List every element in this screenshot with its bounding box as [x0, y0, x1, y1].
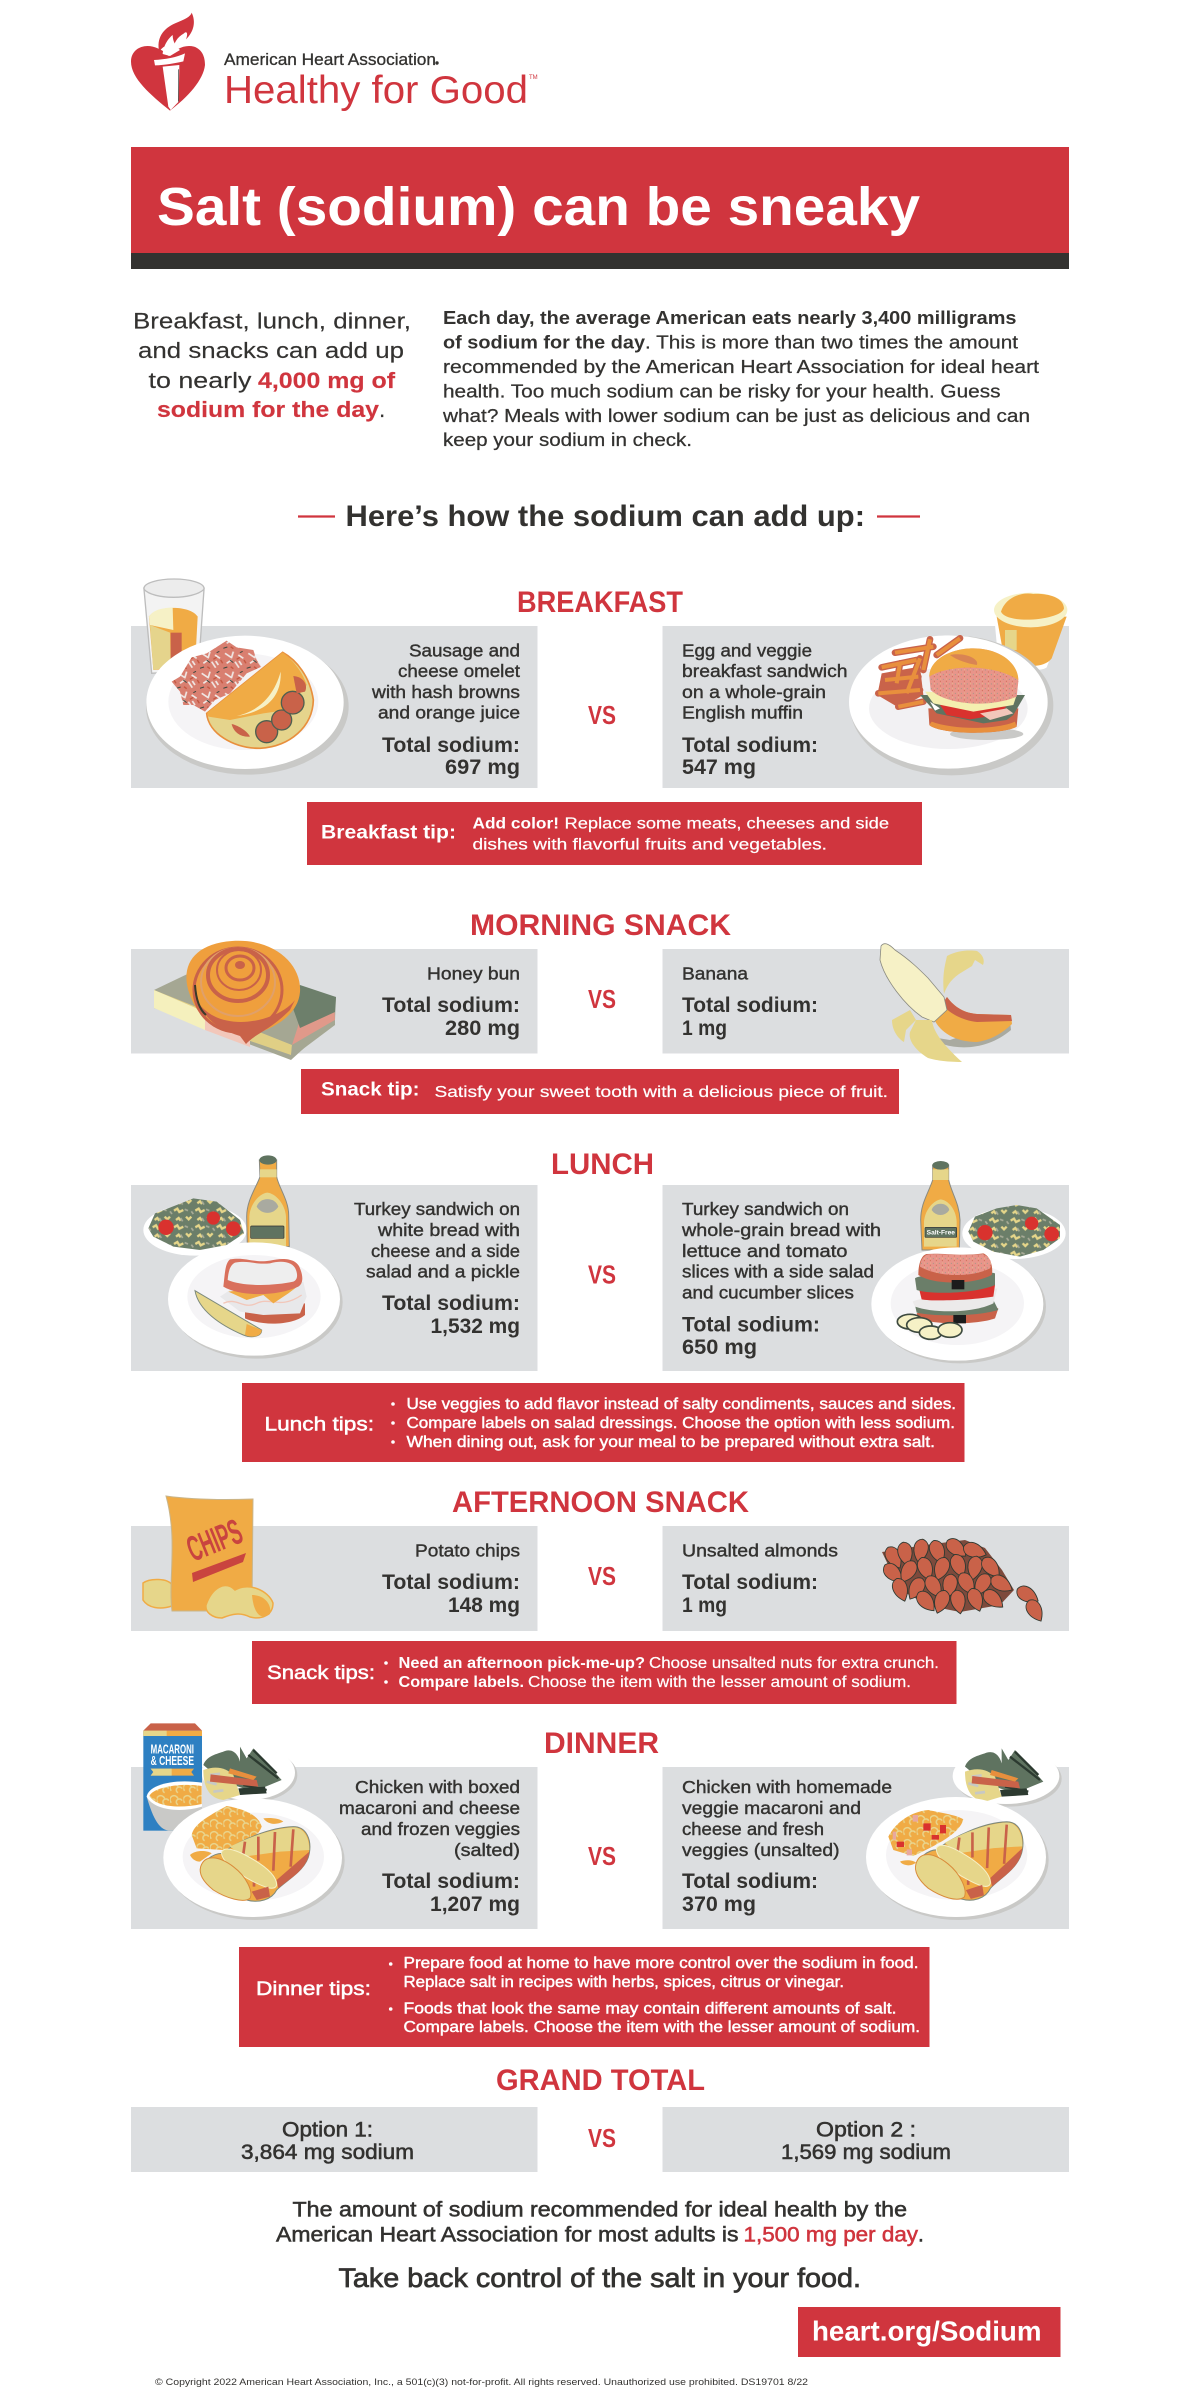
afternoon snack tips: Snack tips: [267, 1662, 375, 1684]
illustration: honey bun [154, 941, 336, 1060]
left option text [382, 1540, 520, 1617]
right option text: breakfast sandwich [682, 661, 848, 681]
left option text: salad and a pickle [366, 1262, 520, 1282]
illustration: turkey sandwich on white bread, salad, dressing [143, 1155, 343, 1359]
heading: grand total: GRAND TOTAL [496, 2064, 705, 2097]
registered mark [435, 61, 439, 65]
panel: afternoon snack [131, 1486, 1069, 1704]
right option text: 1 mg [682, 1017, 727, 1040]
afternoon snack tips: Need an afternoon pick-me-up? [398, 1655, 645, 1672]
right option text: Total sodium: [682, 1314, 820, 1336]
illustration: turkey sandwich on whole grain, salad, dressing [871, 1161, 1066, 1363]
right option text: whole-grain bread with [681, 1220, 881, 1240]
title: Salt (sodium) can be sneaky [157, 177, 920, 237]
left option text: Total sodium: [382, 734, 520, 757]
left option text: 1,532 mg [430, 1315, 520, 1338]
option 2 card [662, 2107, 1069, 2172]
right option text [681, 1199, 881, 1359]
vs: VS [588, 1260, 616, 1290]
right option text: lettuce and tomato [682, 1241, 848, 1261]
option card left [131, 1185, 538, 1371]
right option text [682, 1777, 892, 1916]
snack tip: Satisfy your sweet tooth with a delicious piece of fruit. [434, 1084, 888, 1101]
option card right [662, 626, 1069, 788]
intro right paragraph [442, 308, 1039, 450]
breakfast tip: dishes with flavorful fruits and vegetables. [472, 836, 827, 854]
illustration: egg and veggie sandwich, fries, juice [849, 593, 1067, 775]
section intro heading: Here’s how the sodium can add up: [346, 500, 865, 533]
right option text: cheese and fresh [682, 1819, 824, 1839]
heading: dinner: DINNER [544, 1727, 659, 1760]
dinner tips [239, 1947, 930, 2047]
logo text: American Heart Association: American Heart Association [224, 51, 436, 69]
left option text: and orange juice [378, 702, 520, 722]
heading: morning snack: MORNING SNACK [470, 909, 732, 942]
copyright: © Copyright 2022 American Heart Association, Inc., a 501(c)(3) not-for-profit. All rights reserved. Unauthorized use prohibited. DS19701 8/22 [155, 2377, 808, 2388]
heading: afternoon snack: AFTERNOON SNACK [452, 1486, 750, 1519]
intro right paragraph: health. Too much sodium can be risky for your health. Guess [443, 382, 1000, 402]
panel: dinner [131, 1723, 1069, 2047]
left option text: Total sodium: [382, 1571, 520, 1594]
right option text: veggies (unsalted) [682, 1840, 840, 1860]
right option text: Total sodium: [682, 994, 818, 1017]
intro right paragraph: recommended by the American Heart Association for ideal heart [443, 357, 1039, 377]
afternoon snack tips [252, 1641, 956, 1704]
logo icon: heart and torch [131, 13, 205, 111]
option 1 card [131, 2107, 538, 2172]
dinner tips: Prepare food at home to have more control over the sodium in food. [404, 1955, 918, 1972]
intro right paragraph: . This is more than two times the amount [645, 332, 1018, 352]
intro right paragraph: of sodium for the day [443, 332, 645, 352]
right option text: on a whole-grain [682, 682, 826, 702]
vs: VS [588, 1841, 616, 1871]
right option text: veggie macaroni and [682, 1798, 861, 1818]
right option text: Total sodium: [682, 734, 818, 757]
left option text [382, 964, 520, 1040]
left option text [371, 640, 520, 779]
right option text: Total sodium: [682, 1571, 818, 1594]
title banner [131, 147, 1069, 269]
left option text: Total sodium: [382, 1870, 520, 1893]
right option text: Unsalted almonds [682, 1540, 838, 1560]
vs: VS [588, 700, 616, 730]
left option text: Honey bun [427, 964, 520, 984]
left option text: and frozen veggies [361, 1819, 520, 1839]
illustration: turkey sandwich on whole grain, salad, dressing: Salt-Free [927, 1230, 955, 1237]
left option text: Potato chips [415, 1540, 520, 1560]
option 2 card: 1,569 mg sodium [781, 2141, 951, 2164]
heading: breakfast: BREAKFAST [517, 586, 683, 619]
breakfast tip: Add color! [472, 816, 559, 832]
recommendation statement: The amount of sodium recommended for ideal health by the [292, 2198, 907, 2222]
snack tip [301, 1069, 899, 1114]
recommendation statement [276, 2198, 924, 2246]
right option text: Total sodium: [682, 1870, 818, 1893]
logo text: Healthy for Good: Healthy for Good [224, 69, 528, 112]
lunch tips: Lunch tips: [264, 1414, 374, 1436]
left option text: cheese and a side [371, 1241, 520, 1261]
option 1 card: Option 1: [282, 2118, 373, 2142]
intro left statement: to nearly [148, 368, 252, 393]
intro right paragraph: keep your sodium in check. [443, 430, 692, 450]
box label: & CHEESE [151, 1754, 194, 1768]
recommendation statement: . [918, 2224, 924, 2246]
panel: breakfast [131, 579, 1069, 865]
intro left statement: Breakfast, lunch, dinner, [133, 308, 411, 334]
right option text: 650 mg [682, 1336, 757, 1359]
option card left [131, 1767, 538, 1929]
left option text: (salted) [454, 1840, 520, 1860]
breakfast tip [307, 802, 922, 865]
left option text: with hash browns [371, 682, 520, 702]
illustration: potato chips bag [143, 1496, 273, 1618]
breakfast tip: Replace some meats, cheeses and side [564, 816, 889, 832]
box label: MACARONI [151, 1742, 194, 1756]
option card right [662, 1767, 1069, 1929]
illustration: banana [880, 944, 1012, 1062]
right option text: Egg and veggie [682, 640, 812, 660]
lunch tips: When dining out, ask for your meal to be prepared without extra salt. [406, 1434, 935, 1451]
left option text [339, 1777, 520, 1916]
recommendation statement: American Heart Association for most adults is [276, 2224, 738, 2246]
left option text: Turkey sandwich on [354, 1199, 520, 1219]
intro right paragraph: what? Meals with lower sodium can be just as delicious and can [442, 406, 1030, 426]
intro left statement: . [379, 397, 385, 422]
left option text: 697 mg [445, 756, 520, 779]
intro left statement: and snacks can add up [138, 338, 404, 363]
right option text [682, 964, 818, 1040]
chips label: CHIPS [181, 1511, 248, 1569]
option card left [131, 1526, 538, 1631]
right option text: English muffin [682, 702, 803, 722]
right option text: Chicken with homemade [682, 1777, 892, 1797]
lunch tips: Use veggies to add flavor instead of salty condiments, sauces and sides. [406, 1396, 956, 1413]
dinner tips: Dinner tips: [256, 1978, 371, 2000]
lunch tips [242, 1383, 964, 1462]
panel: morning snack [131, 909, 1069, 1114]
option card left [131, 949, 538, 1054]
heading: lunch: LUNCH [551, 1148, 654, 1181]
illustration: chicken with homemade macaroni [866, 1748, 1062, 1920]
closing statement: Take back control of the salt in your food. [338, 2263, 861, 2293]
option card right [662, 1526, 1069, 1631]
panel: grand total [131, 2064, 1069, 2172]
option card right [662, 949, 1069, 1054]
left option text: 280 mg [445, 1017, 520, 1040]
website call to action [798, 2307, 1060, 2357]
lunch tips: Compare labels on salad dressings. Choose the option with less sodium. [406, 1415, 955, 1432]
option 1 card: 3,864 mg sodium [241, 2141, 414, 2164]
logo: American Heart Association Healthy for Good [131, 13, 538, 112]
afternoon snack tips: Compare labels. [398, 1674, 524, 1691]
left option text: Total sodium: [382, 1292, 520, 1315]
illustration: chicken with boxed macaroni [143, 1723, 345, 1920]
intro left statement [133, 308, 411, 422]
breakfast tip: Breakfast tip: [321, 822, 456, 844]
left option text: cheese omelet [398, 661, 520, 681]
right option text: Turkey sandwich on [682, 1199, 849, 1219]
left option text: Total sodium: [382, 994, 520, 1017]
trademark: TM [529, 75, 538, 81]
right option text: 547 mg [682, 756, 756, 779]
dinner tips: Compare labels. Choose the item with the lesser amount of sodium. [404, 2019, 920, 2036]
right option text: slices with a side salad [682, 1262, 874, 1282]
left option text [354, 1199, 520, 1338]
left option text: Sausage and [409, 640, 520, 660]
right option text: 1 mg [682, 1594, 727, 1617]
website call to action: heart.org/Sodium [812, 2316, 1042, 2346]
left option text: Chicken with boxed [355, 1777, 520, 1797]
right option text: 370 mg [682, 1893, 756, 1916]
dinner tips: Foods that look the same may contain different amounts of salt. [404, 2000, 896, 2018]
snack tip: Snack tip: [321, 1078, 420, 1100]
option card left [131, 626, 538, 788]
dinner tips: Replace salt in recipes with herbs, spices, citrus or vinegar. [404, 1974, 844, 1991]
intro right paragraph: Each day, the average American eats nearly 3,400 milligrams [443, 308, 1016, 328]
vs: VS [588, 984, 616, 1014]
right option text: Banana [682, 964, 748, 984]
recommendation statement: 1,500 mg per day [744, 2224, 919, 2246]
option card right [662, 1185, 1069, 1371]
right option text: and cucumber slices [682, 1282, 854, 1302]
panel: lunch [131, 1148, 1069, 1462]
illustration: omelet, hash browns, orange juice [144, 579, 349, 775]
left option text: macaroni and cheese [339, 1798, 520, 1818]
intro left statement: sodium for the day [157, 397, 380, 422]
option 2 card: Option 2 : [816, 2118, 916, 2142]
left option text: white bread with [377, 1220, 520, 1240]
illustration: almonds [880, 1535, 1047, 1625]
vs: VS [588, 1561, 616, 1591]
left option text: 1,207 mg [430, 1893, 520, 1916]
vs: VS [588, 2123, 616, 2153]
right option text [682, 640, 848, 779]
left option text: 148 mg [448, 1594, 520, 1617]
afternoon snack tips: Choose the item with the lesser amount of sodium. [528, 1674, 911, 1691]
intro left statement: 4,000 mg of [258, 368, 396, 393]
afternoon snack tips: Choose unsalted nuts for extra crunch. [649, 1655, 939, 1672]
right option text [682, 1540, 838, 1617]
